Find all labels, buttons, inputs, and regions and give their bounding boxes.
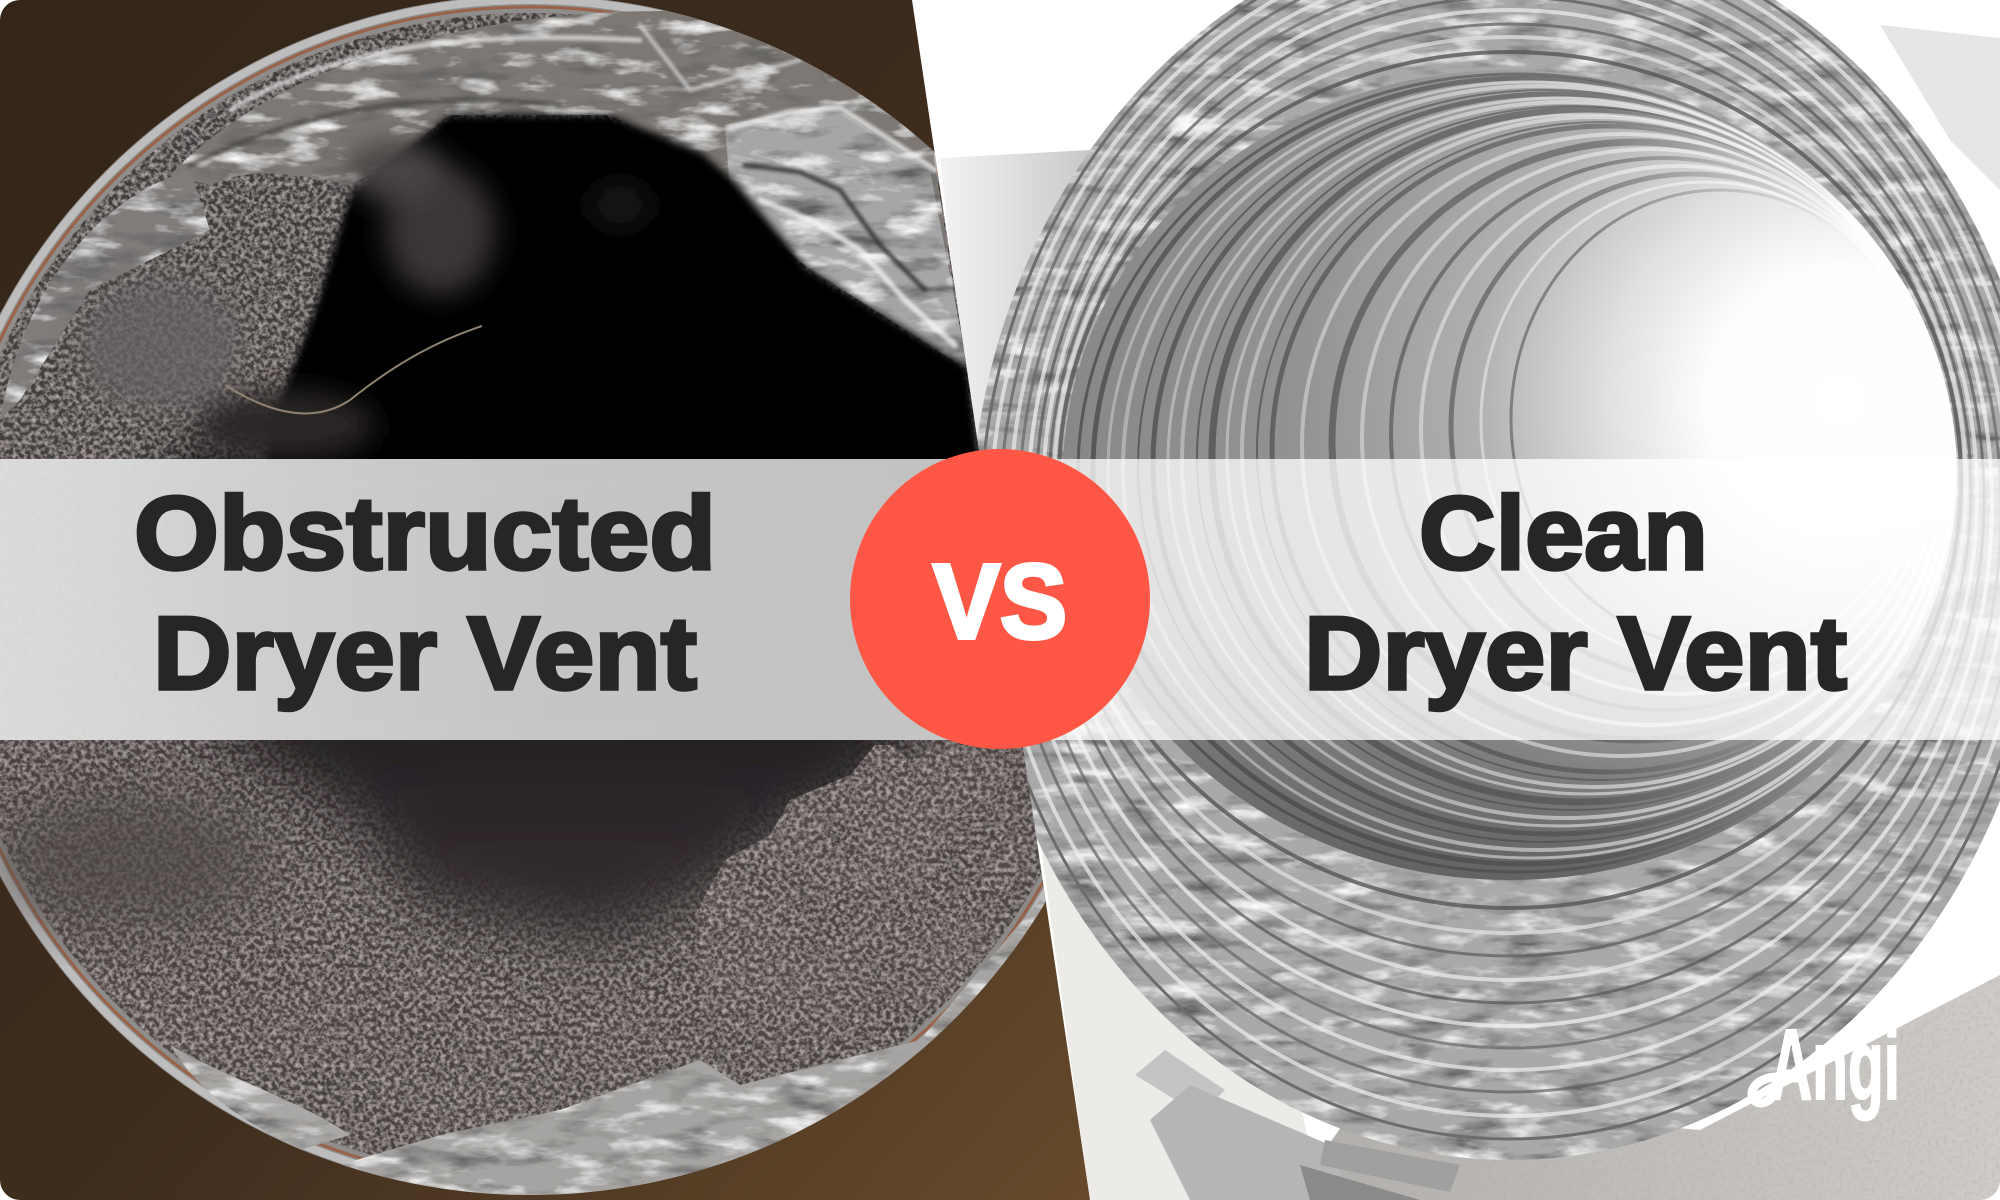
heading line 1: Obstructed [134,476,716,592]
duct interior [1063,70,1957,880]
heading: clean dryer vent [1304,476,1847,712]
heading line 2: Dryer Vent [153,596,697,712]
banner: left translucent strip [0,459,1000,740]
floor [1290,975,2000,1200]
duct interior lower shading [1172,740,1848,880]
duct outer rim [970,0,2000,1160]
bottom left foil patch [170,1045,350,1150]
panel: obstructed dryer vent photo [0,0,1130,1200]
brown background [0,0,1100,1200]
panel: clean dryer vent photo [900,0,2000,1200]
duct interior corrugation rings [1078,74,1956,872]
background wall [900,0,2000,1200]
copper wire [0,7,1118,1183]
lower wall [1040,840,1320,1200]
silver rim highlight [0,0,1125,1190]
black hole upper [260,115,979,480]
lint lower tone patches [0,750,1005,930]
badge: vs circle: VS [933,543,1067,661]
hose clamp [1135,1050,1460,1200]
logo: Angi: Angi [1770,1009,1900,1121]
heading line 2: Dryer Vent [1304,596,1847,712]
right foil sheet [725,105,968,370]
top foil [170,11,965,365]
heading: obstructed dryer vent [134,476,716,712]
bottom foil strip [340,900,1090,1200]
logo: Angi [1752,1009,1900,1121]
heading line 1: Clean [1419,476,1708,592]
banner: right translucent strip [1000,459,2000,740]
foil creases [190,25,955,345]
left foil scraps [0,170,210,420]
lint mass [0,13,1112,1177]
lint puffs upper [80,140,650,460]
rear duct left [940,150,1090,470]
vent circle [0,0,1130,1195]
lint bulge right [700,745,1030,1050]
badge: vs circle [850,449,1150,749]
lint wire strand [225,326,482,414]
rear duct right [1880,25,2000,190]
duct rim rings [980,0,2000,1139]
black hole lower [150,459,982,945]
